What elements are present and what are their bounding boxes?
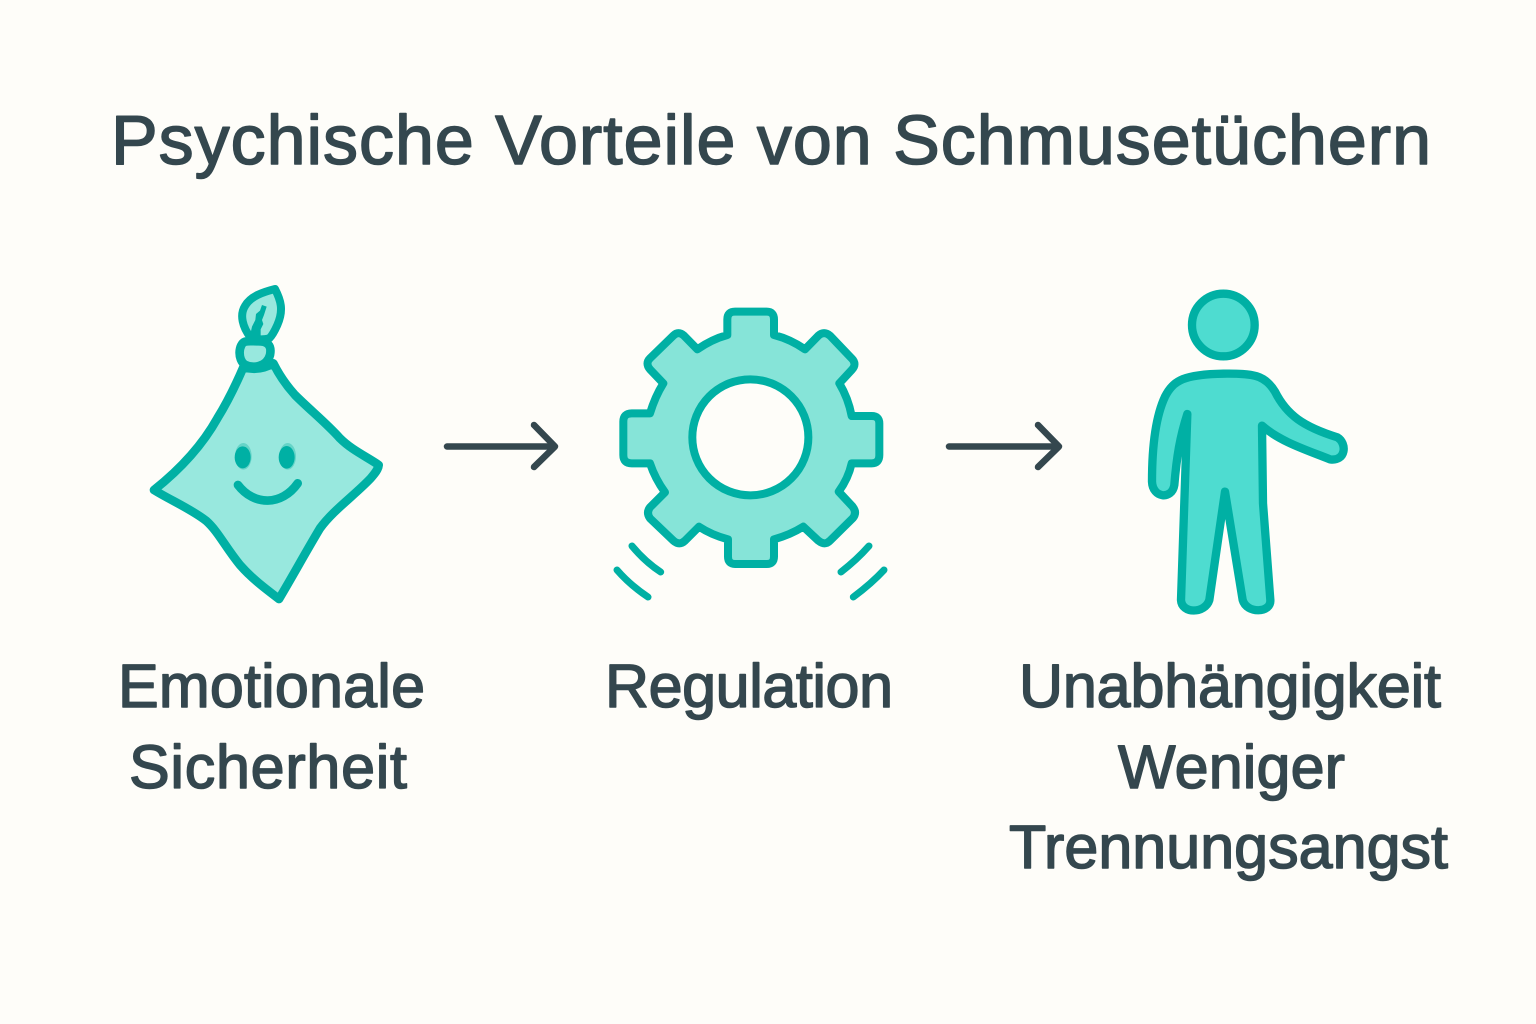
label: Unabhängigkeit Weniger Trennungsangst: Trennungsangst xyxy=(1009,813,1448,881)
cloth body xyxy=(154,363,379,599)
eyes xyxy=(235,443,296,470)
motion lines xyxy=(617,546,884,597)
head xyxy=(1192,294,1255,356)
leaf vein xyxy=(250,305,267,336)
label: Unabhängigkeit Weniger Trennungsangst: Weniger xyxy=(1118,733,1345,801)
gear wheel xyxy=(623,312,879,564)
smile xyxy=(238,483,298,501)
label: Unabhängigkeit Weniger Trennungsangst xyxy=(1009,652,1448,881)
arrow 1 xyxy=(447,425,555,467)
leaf xyxy=(242,289,281,339)
arrow 2 xyxy=(949,425,1059,467)
body xyxy=(1152,374,1344,610)
icon: smiling comfort cloth xyxy=(154,289,379,599)
label: Emotionale Sicherheit: Emotionale xyxy=(118,652,425,720)
label: Emotionale Sicherheit: Sicherheit xyxy=(129,733,407,801)
icon: person xyxy=(1152,294,1344,610)
knot xyxy=(240,341,270,367)
label: Emotionale Sicherheit xyxy=(118,652,425,801)
title: Psychische Vorteile von Schmusetüchern xyxy=(111,101,1431,179)
label: Unabhängigkeit Weniger Trennungsangst: Unabhängigkeit xyxy=(1019,652,1441,720)
icon: gear xyxy=(617,312,884,597)
label: Regulation: Regulation xyxy=(605,652,893,720)
